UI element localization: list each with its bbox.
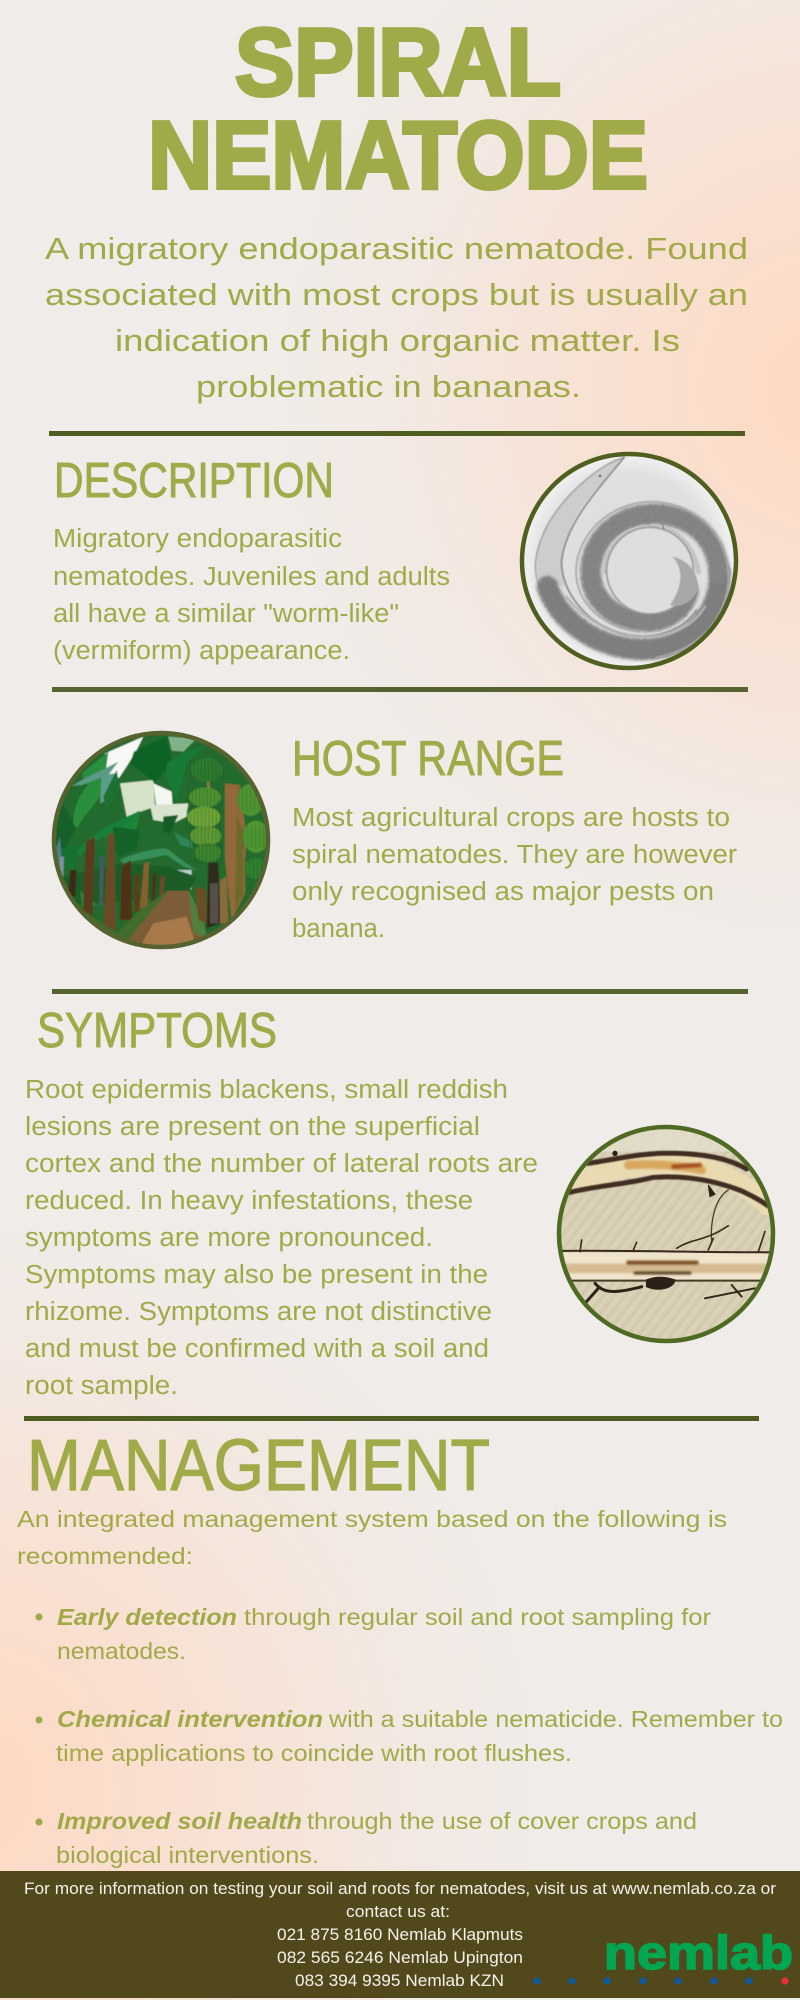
lateral roots: [585, 1283, 642, 1303]
title: SPIRAL: [235, 9, 561, 116]
footer contact text: 083 394 9395 Nemlab KZN: [295, 1972, 504, 1990]
lower root: [563, 1252, 769, 1280]
text: host range: spiral nematodes. They are however: [292, 841, 738, 869]
heading: description: DESCRIPTION: [54, 454, 334, 508]
heading: management: MANAGEMENT: [27, 1426, 490, 1506]
nematode gut, outer loop: [547, 573, 720, 649]
bullet: early detection: [35, 1604, 711, 1664]
bullet: improved soil health: [35, 1808, 697, 1868]
title: NEMATODE: [148, 102, 648, 209]
text: symptoms: symptoms are more pronounced.: [25, 1224, 433, 1252]
intro text: problematic in bananas.: [196, 369, 581, 404]
bullet: improved soil health: Improved soil health: [57, 1808, 302, 1834]
right banana bunches: [237, 784, 264, 816]
title: [148, 9, 648, 209]
footer contact text: 021 875 8160 Nemlab Klapmuts: [277, 1926, 523, 1944]
bullet: improved soil health: through the use of cover crops and: [307, 1808, 697, 1834]
bullet: early detection: through regular soil and root sampling for: [244, 1604, 711, 1630]
text: symptoms: Root epidermis blackens, small reddish: [25, 1076, 508, 1104]
nematode fore-section, pale: [536, 458, 624, 587]
bullet: chemical intervention: Chemical intervention: [57, 1706, 323, 1732]
intro text: [45, 231, 748, 404]
footer contact text: contact us at:: [346, 1903, 450, 1921]
mid canopy: [120, 848, 197, 870]
tail: [670, 557, 698, 606]
bullet: chemical intervention: with a suitable nematicide. Remember to: [328, 1706, 783, 1732]
separating line between loops: [567, 597, 705, 637]
footer panel: [0, 1871, 800, 1998]
text: symptoms: Symptoms may also be present in the: [25, 1261, 488, 1289]
inner pale ring and centre: [605, 527, 698, 572]
text: host range: [292, 804, 738, 943]
text: symptoms: [25, 1076, 538, 1400]
text: symptoms: lesions are present on the superficial: [25, 1113, 480, 1141]
text: symptoms: reduced. In heavy infestations, these: [25, 1187, 473, 1215]
bullet: early detection: nematodes.: [57, 1638, 186, 1664]
banana bunch: [206, 781, 211, 788]
heading: symptoms: SYMPTOMS: [37, 1004, 277, 1058]
text: management intro: An integrated management system based on the following is: [17, 1506, 727, 1532]
text: management intro: recommended:: [17, 1543, 193, 1569]
image: nematode micrograph: [520, 452, 738, 670]
bullet: improved soil health: biological interventions.: [56, 1842, 319, 1868]
heading: host range: HOST RANGE: [292, 732, 564, 786]
nematode outline lines: [576, 502, 728, 632]
text: description: Migratory endoparasitic: [53, 525, 342, 553]
sky gaps: [104, 736, 144, 779]
text: symptoms: root sample.: [25, 1372, 178, 1400]
right trunk: [225, 783, 246, 920]
text: description: nematodes. Juveniles and adults: [53, 563, 450, 591]
footer contact text: For more information on testing your soil and roots for nematodes, visit us at www.nemlab.co.za or: [24, 1880, 777, 1898]
text: host range: only recognised as major pests on: [292, 878, 714, 906]
image: infected banana roots: [555, 1125, 775, 1345]
bullet: chemical intervention: [35, 1706, 783, 1766]
text: description: [53, 525, 450, 665]
text: description: all have a similar "worm-like": [53, 600, 399, 628]
nematode gut, coil: [591, 514, 719, 622]
upper root: [573, 1165, 768, 1205]
text: host range: banana.: [292, 915, 385, 943]
bullet: early detection: Early detection: [57, 1604, 237, 1630]
text: symptoms: rhizome. Symptoms are not distinctive: [25, 1298, 492, 1326]
text: host range: Most agricultural crops are hosts to: [292, 804, 730, 832]
image: banana plantation: [50, 730, 270, 950]
left leaves: [56, 805, 76, 848]
intro text: A migratory endoparasitic nematode. Found: [45, 231, 748, 266]
intro text: associated with most crops but is usually an: [45, 277, 748, 312]
intro text: indication of high organic matter. Is: [115, 323, 680, 358]
ground path: [84, 890, 168, 940]
text: symptoms: and must be confirmed with a soil and: [25, 1335, 489, 1363]
trunks: [83, 837, 95, 917]
text: symptoms: cortex and the number of lateral roots are: [25, 1150, 538, 1178]
footer contact text: [24, 1880, 777, 1990]
text: management intro: [17, 1506, 727, 1569]
logo: nemlab: [533, 1926, 793, 1985]
logo: nemlab: nemlab: [604, 1926, 793, 1979]
top leaves: [130, 736, 172, 783]
text: description: (vermiform) appearance.: [53, 637, 350, 665]
bullet: chemical intervention: time applications to coincide with root flushes.: [56, 1740, 572, 1766]
footer contact text: 082 565 6246 Nemlab Upington: [277, 1949, 523, 1967]
